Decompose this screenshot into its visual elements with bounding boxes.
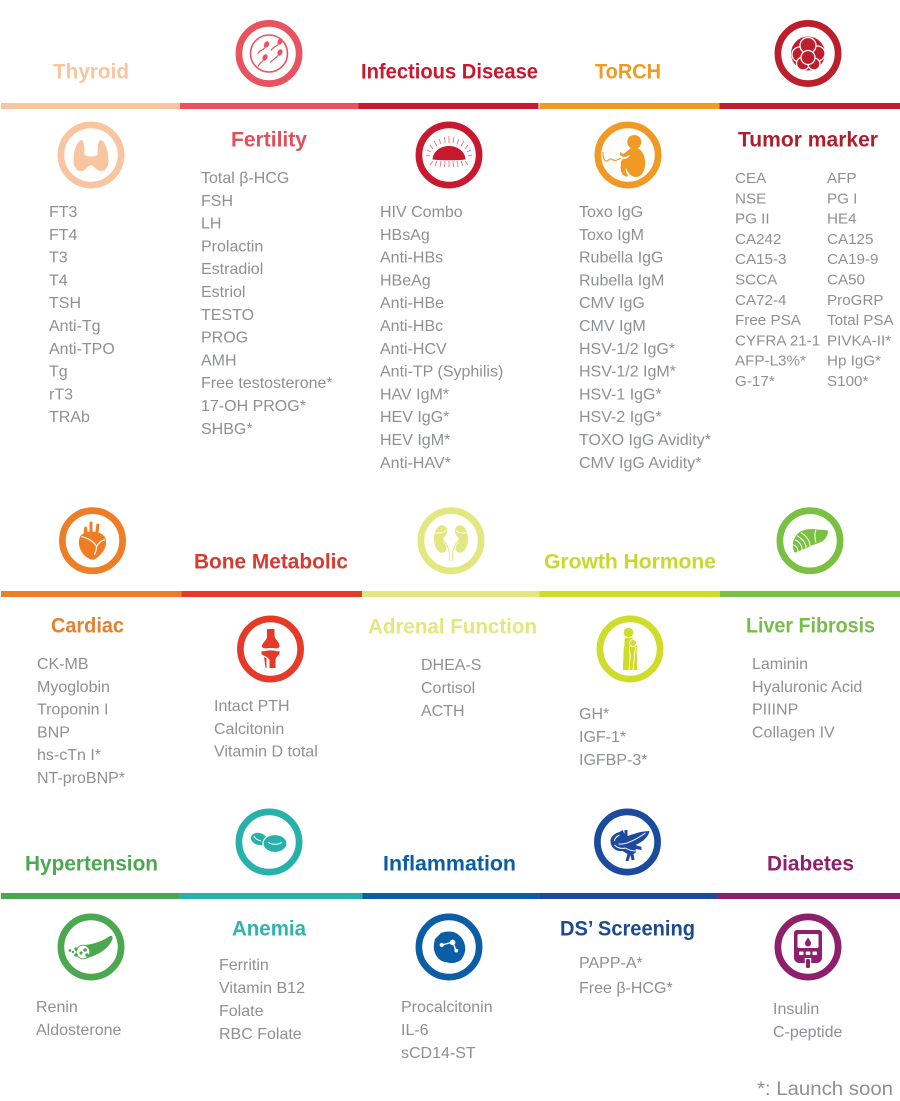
panel: Anemia [179,812,362,1043]
panel: ToRCH [540,60,720,472]
list: Cardiac tests: Myoglobin [37,679,110,696]
list: Tumor markers column 2: CA125 [827,231,873,248]
list: Infectious Disease tests: Anti-HBc [380,318,443,335]
panel: Growth Hormone [540,550,720,769]
icon: blood vessel [61,917,121,977]
list: Tumor markers column 1: CA72-4 [735,292,786,309]
list: ToRCH tests: CMV IgG Avidity* [579,455,701,472]
list: ToRCH tests: HSV-2 IgG* [579,409,662,426]
list: Thyroid tests: T4 [49,272,68,289]
list: ToRCH tests: CMV IgG [579,295,645,312]
list: Cardiac tests: NT-proBNP* [37,770,125,787]
list: Cardiac tests: Troponin I [37,702,108,719]
icon: sperm cells [239,23,299,84]
list: Thyroid tests: Anti-Tg [49,318,101,335]
list: Infectious Disease tests: HBsAg [380,227,430,244]
list: Hypertension tests: Aldosterone [36,1022,121,1039]
list: Tumor markers column 2: HE4 [827,211,857,228]
list: Anemia tests: Ferritin [219,957,269,974]
heading: Bone Metabolic: Bone Metabolic [194,550,348,574]
list: Fertility tests: LH [201,216,221,233]
list: Liver Fibrosis tests: Hyaluronic Acid [752,679,862,696]
list: Cardiac tests: BNP [37,724,70,741]
panel: Bone Metabolic [182,550,362,761]
icon: red blood cells [239,812,299,872]
list: Tumor markers column 2: ProGRP [827,292,884,309]
list: Bone Metabolic tests: Vitamin D total [214,744,318,761]
panel: Liver Fibrosis [720,511,900,741]
panel: Inflammation [362,852,540,1062]
panel: DS' Screening [540,812,718,997]
list: Fertility tests: FSH [201,193,233,210]
list: Fertility tests: Total β-HCG [201,170,289,187]
list: Anemia tests: Vitamin B12 [219,980,305,997]
list: ToRCH tests: Toxo IgM [579,227,644,244]
list: Thyroid tests: FT3 [49,204,78,221]
list: Tumor markers column 2: PG I [827,190,857,207]
list: Inflammation tests: Procalcitonin [401,999,493,1016]
list: Fertility tests: AMH [201,352,237,369]
list: ToRCH tests: Toxo IgG [579,204,643,221]
panel: Thyroid [1,60,180,426]
list: Infectious Disease tests: HEV IgM* [380,432,450,449]
heading: Thyroid: Thyroid [53,60,129,84]
list: Adrenal Function tests: ACTH [421,703,465,720]
list: ToRCH tests: HSV-1/2 IgG* [579,341,675,358]
list: Cardiac tests: CK-MB [37,656,89,673]
icon: pancreas [597,812,658,872]
list: Tumor markers column 2: Total PSA [827,312,895,329]
list: Diabetes tests: C-peptide [773,1024,842,1041]
heading: Adrenal Function: Adrenal Function [368,616,537,638]
list: Thyroid tests: Tg [49,364,68,381]
list: Fertility tests: PROG [201,330,248,347]
list: Anemia tests: Folate [219,1003,264,1020]
list: ToRCH tests: HSV-1 IgG* [579,386,662,403]
list: Fertility tests: Estriol [201,284,245,301]
panel: Infectious Disease [358,60,538,472]
list: ToRCH tests: TOXO IgG Avidity* [579,432,711,449]
heading: Infectious Disease: Infectious Disease [361,60,538,84]
list: Infectious Disease tests: HIV Combo [380,204,463,221]
list: Infectious Disease tests: Anti-HBe [380,295,444,312]
list: Growth Hormone tests: GH* [579,706,609,723]
list: Tumor markers column 1: SCCA [735,272,778,288]
panel: Adrenal Function [362,511,540,720]
list: Thyroid tests: Anti-TPO [49,341,115,358]
icon: knee joint [240,619,301,679]
list: Bone Metabolic tests: Intact PTH [214,698,290,715]
list: Infectious Disease tests: HEV IgG* [380,409,449,426]
heading: Tumor marker: Tumor marker [738,128,878,152]
list: Tumor markers column 1: CA15-3 [735,251,786,268]
heading: Fertility: Fertility [231,128,307,152]
heading: Growth Hormone: Growth Hormone [544,550,716,574]
list: Infectious Disease tests: Anti-HCV [380,341,447,358]
panel: Fertility [180,23,358,438]
list: Growth Hormone tests: IGFBP-3* [579,752,647,769]
list: Fertility tests: Free testosterone* [201,375,333,392]
list: Fertility tests: 17-OH PROG* [201,398,306,415]
list: Liver Fibrosis tests: Collagen IV [752,724,835,741]
list: Tumor markers column 2: CA50 [827,272,865,288]
list: Thyroid tests: TRAb [49,409,90,426]
list: Adrenal Function tests: DHEA-S [421,657,481,674]
heading: Hypertension: Hypertension [25,852,158,876]
footnote: *: Launch soon [757,1079,893,1100]
list: Tumor markers column 1: CA242 [735,231,781,248]
list: Growth Hormone tests: IGF-1* [579,729,626,746]
heading: Cardiac: Cardiac [51,614,124,638]
list: ToRCH tests: Rubella IgM [579,272,664,289]
list: ToRCH tests: CMV IgM [579,318,646,335]
heading: Inflammation: Inflammation [383,852,516,876]
list: Infectious Disease tests: Anti-HBs [380,250,443,267]
icon: glucose meter [778,917,838,977]
list: Tumor markers column 1: G-17* [735,373,775,390]
panel: Cardiac [1,511,182,787]
list: Fertility tests: Prolactin [201,238,263,255]
heading: Diabetes: Diabetes [767,852,854,876]
list: Fertility tests: SHBG* [201,421,253,438]
list: ToRCH tests: Rubella IgG [579,250,664,267]
panel: Tumor marker [720,23,900,390]
list: Thyroid tests: T3 [49,250,68,267]
icon: kidneys [421,511,481,571]
icon: inflammatory cell [419,917,479,977]
list: Fertility tests: TESTO [201,307,254,324]
list: Thyroid tests: FT4 [49,227,78,244]
icon: thyroid gland [61,125,121,185]
icon: tumor cell cluster [778,23,838,84]
list: Infectious Disease tests: Anti-TP (Syphilis) [380,364,503,381]
list: Thyroid tests: rT3 [49,386,73,403]
icon: heart [62,511,123,571]
list: Inflammation tests: IL-6 [401,1022,429,1039]
list: Thyroid tests: TSH [49,295,81,312]
heading: DS' Screening: DS’ Screening [560,918,695,940]
list: Tumor markers column 2: CA19-9 [827,251,878,268]
list: Infectious Disease tests: HBeAg [380,272,431,289]
list: Cardiac tests: hs-cTn I* [37,747,101,764]
list: Inflammation tests: sCD14-ST [401,1045,476,1062]
list: Tumor markers column 1: AFP-L3%* [735,353,806,370]
icon: pathogen [419,125,479,185]
list: ToRCH tests: HSV-1/2 IgM* [579,364,676,381]
list: Anemia tests: RBC Folate [219,1026,302,1043]
heading: Anemia: Anemia [232,918,306,940]
icon: fetus [598,125,658,185]
panel: Diabetes [718,852,900,1041]
icon: liver [780,511,840,571]
list: Hypertension tests: Renin [36,999,78,1016]
list: Liver Fibrosis tests: Laminin [752,656,808,673]
icon: growing figures [600,619,660,679]
list: Tumor markers column 2: S100* [827,373,868,390]
list: Diabetes tests: Insulin [773,1001,819,1018]
list: Fertility tests: Estradiol [201,261,263,278]
list: Tumor markers column 1: PG II [735,211,770,228]
list: Tumor markers column 2: AFP [827,170,857,187]
list: Infectious Disease tests: Anti-HAV* [380,455,451,472]
list: Tumor markers column 1: NSE [735,190,766,207]
heading: Liver Fibrosis: Liver Fibrosis [746,614,875,638]
heading: ToRCH: ToRCH [595,60,661,84]
list: Liver Fibrosis tests: PIIINP [752,702,798,719]
list: Tumor markers column 2: PIVKA-II* [827,332,891,349]
list: DS' Screening tests: Free β-HCG* [579,980,673,997]
list: Tumor markers column 2: Hp IgG* [827,353,881,370]
list: Tumor markers column 1: CEA [735,170,767,187]
list: Bone Metabolic tests: Calcitonin [214,721,284,738]
list: DS' Screening tests: PAPP-A* [579,955,643,972]
list: Infectious Disease tests: HAV IgM* [380,386,449,403]
list: Adrenal Function tests: Cortisol [421,680,475,697]
list: Tumor markers column 1: Free PSA [735,312,802,329]
list: Tumor markers column 1: CYFRA 21-1 [735,332,820,349]
panel: Hypertension [1,852,179,1039]
